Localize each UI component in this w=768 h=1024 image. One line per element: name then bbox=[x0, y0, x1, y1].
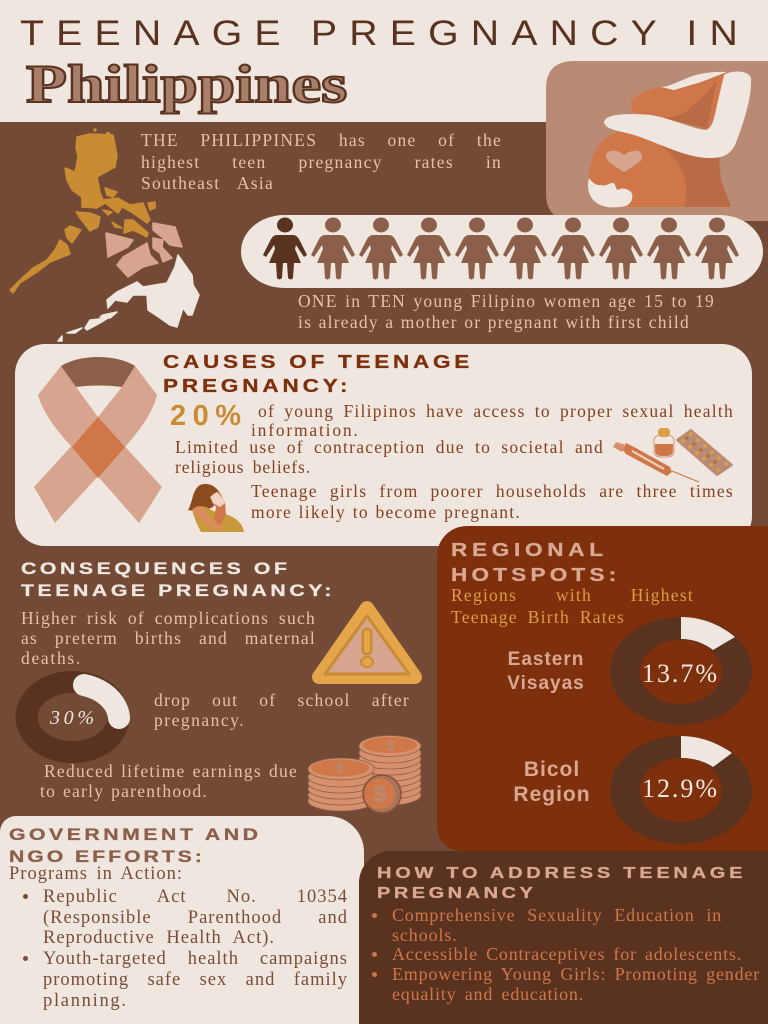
Visayas region bbox=[106, 223, 182, 277]
text: sexual health access: of young Filipinos have access to proper sexual health bbox=[258, 401, 734, 421]
text: limited contraception: religious beliefs. bbox=[175, 457, 311, 477]
heading: consequences: CONSEQUENCES OF bbox=[21, 559, 291, 578]
text: sexual health access bbox=[251, 401, 734, 440]
intro text: highest teen pregnancy rates in bbox=[141, 152, 502, 172]
list item: health campaigns bbox=[43, 949, 348, 1011]
chart: Eastern Visayas donut: 13.7% bbox=[642, 659, 717, 688]
label: Bicol Region bbox=[513, 758, 591, 806]
text: sexual health access: information. bbox=[251, 420, 360, 440]
text: health risks: as preterm births and maternal bbox=[21, 628, 316, 648]
subheading: highest birth rates: Regions with Highest bbox=[451, 585, 694, 605]
text: limited contraception bbox=[175, 437, 604, 477]
icon: syringe, vial and pills bbox=[613, 428, 733, 482]
heading: how to address bbox=[377, 864, 746, 902]
map of the Philippines bbox=[9, 128, 200, 342]
heading: consequences: TEENAGE PREGNANCY: bbox=[21, 581, 335, 600]
heading: causes: PREGNANCY: bbox=[163, 376, 351, 396]
icon row: ten women bbox=[263, 218, 739, 280]
panel: government and NGO efforts bbox=[0, 816, 364, 1024]
label: Bicol Region: Region bbox=[513, 783, 591, 806]
intro text: THE PHILIPPINES has one of the bbox=[141, 130, 502, 150]
label: Eastern Visayas: Eastern bbox=[508, 648, 584, 670]
icon: ribbon bbox=[34, 357, 162, 523]
icon: warning triangle bbox=[312, 601, 422, 684]
heading: regional hotspots: REGIONAL bbox=[451, 540, 608, 560]
list item: health campaigns: promoting safe sex and family bbox=[43, 970, 348, 990]
subheading: highest birth rates bbox=[451, 585, 694, 627]
subheading: highest birth rates: Teenage Birth Rates bbox=[451, 607, 625, 627]
heading: government: GOVERNMENT AND bbox=[9, 825, 261, 844]
one in ten text bbox=[298, 291, 715, 332]
stat: 20 percent: 20% bbox=[170, 400, 248, 432]
intro text bbox=[141, 130, 502, 193]
bullet bbox=[22, 894, 28, 898]
bullet bbox=[372, 912, 377, 918]
text: school dropout bbox=[154, 690, 410, 730]
list item: health campaigns: planning. bbox=[43, 991, 128, 1011]
icon: coin stacks: $ bbox=[386, 737, 394, 753]
heading: consequences bbox=[21, 559, 335, 600]
text: limited contraception: Limited use of contraception due to societal and bbox=[175, 437, 604, 457]
list item: sexuality education bbox=[392, 905, 722, 945]
panel: how to address bbox=[359, 851, 768, 1024]
intro text: Southeast Asia bbox=[141, 173, 274, 193]
list item: Republic Act: (Responsible Parenthood and bbox=[43, 908, 348, 928]
Mindanao region bbox=[58, 255, 199, 341]
icon: coin stacks: $ bbox=[336, 760, 344, 776]
list item: Republic Act: Reproductive Health Act). bbox=[43, 928, 275, 948]
panel: one in ten figures bbox=[241, 215, 763, 288]
heading: how to address: PREGNANCY bbox=[377, 884, 536, 902]
list item: contraceptives: Accessible Contraceptives for adolescents. bbox=[392, 944, 742, 964]
one in ten text: ONE in TEN young Filipino women age 15 to 19 bbox=[298, 291, 715, 311]
text: school dropout: pregnancy. bbox=[154, 710, 245, 730]
list item: Republic Act: Republic Act No. 10354 bbox=[43, 887, 348, 907]
list item: empowering girls bbox=[392, 964, 760, 1004]
list item: empowering girls: Empowering Young Girls: Promoting gender bbox=[392, 964, 760, 984]
text: poorer households: Teenage girls from poorer households are three times bbox=[251, 481, 734, 501]
text: reduced earnings: to early parenthood. bbox=[40, 781, 208, 801]
list item: empowering girls: equality and education. bbox=[392, 984, 584, 1004]
list item: sexuality education: schools. bbox=[392, 925, 458, 945]
label: Bicol Region: Bicol bbox=[524, 758, 580, 781]
heading: causes bbox=[163, 352, 473, 396]
Luzon region bbox=[10, 129, 155, 293]
heading: government bbox=[9, 825, 261, 866]
heading: regional hotspots bbox=[451, 540, 621, 585]
title: Philippines: Philippines bbox=[26, 54, 347, 114]
chart: Bicol Region donut: 12.9% bbox=[642, 774, 717, 803]
heading: how to address: HOW TO ADDRESS TEENAGE bbox=[377, 864, 746, 882]
title line: TEENAGE PREGNANCY IN bbox=[20, 14, 750, 53]
text: health risks: Higher risk of complications such bbox=[21, 608, 316, 628]
heading: regional hotspots: HOTSPOTS: bbox=[451, 565, 621, 585]
list item: health campaigns: Youth-targeted health campaigns bbox=[43, 949, 348, 969]
chart: Bicol Region donut bbox=[610, 736, 752, 844]
icon: crying girl bbox=[188, 484, 244, 532]
icon: coin stacks: $ bbox=[374, 781, 387, 807]
heading: government: NGO EFFORTS: bbox=[9, 847, 205, 866]
text: school dropout: drop out of school after bbox=[154, 690, 410, 710]
bullet bbox=[372, 952, 377, 956]
list item: sexuality education: Comprehensive Sexuality Education in bbox=[392, 905, 722, 925]
text: reduced earnings bbox=[40, 761, 298, 801]
bullet bbox=[22, 956, 28, 960]
text: health risks: deaths. bbox=[21, 648, 82, 668]
list item: Republic Act bbox=[43, 887, 348, 948]
chart: 30 percent donut bbox=[16, 671, 130, 763]
panel: regional hotspots bbox=[437, 526, 768, 851]
chart: 30 percent donut: 30% bbox=[49, 707, 94, 729]
heading: causes: CAUSES OF TEENAGE bbox=[163, 352, 473, 372]
label: Eastern Visayas bbox=[507, 648, 585, 694]
text: poorer households bbox=[251, 481, 734, 522]
text: poorer households: more likely to become pregnant. bbox=[251, 502, 521, 522]
bullet bbox=[372, 972, 377, 976]
text: reduced earnings: Reduced lifetime earnings due bbox=[44, 761, 298, 781]
text: health risks bbox=[21, 608, 316, 668]
one in ten text: is already a mother or pregnant with first child bbox=[298, 312, 690, 332]
text: programs in action: Programs in Action: bbox=[9, 864, 183, 884]
label: Eastern Visayas: Visayas bbox=[507, 672, 585, 694]
panel: causes bbox=[15, 344, 752, 546]
chart: Eastern Visayas donut bbox=[610, 617, 752, 725]
icon: pregnant woman panel bbox=[546, 61, 768, 221]
section: consequences bbox=[16, 559, 422, 814]
icon: coin stacks bbox=[308, 735, 422, 814]
header band bbox=[0, 0, 768, 122]
